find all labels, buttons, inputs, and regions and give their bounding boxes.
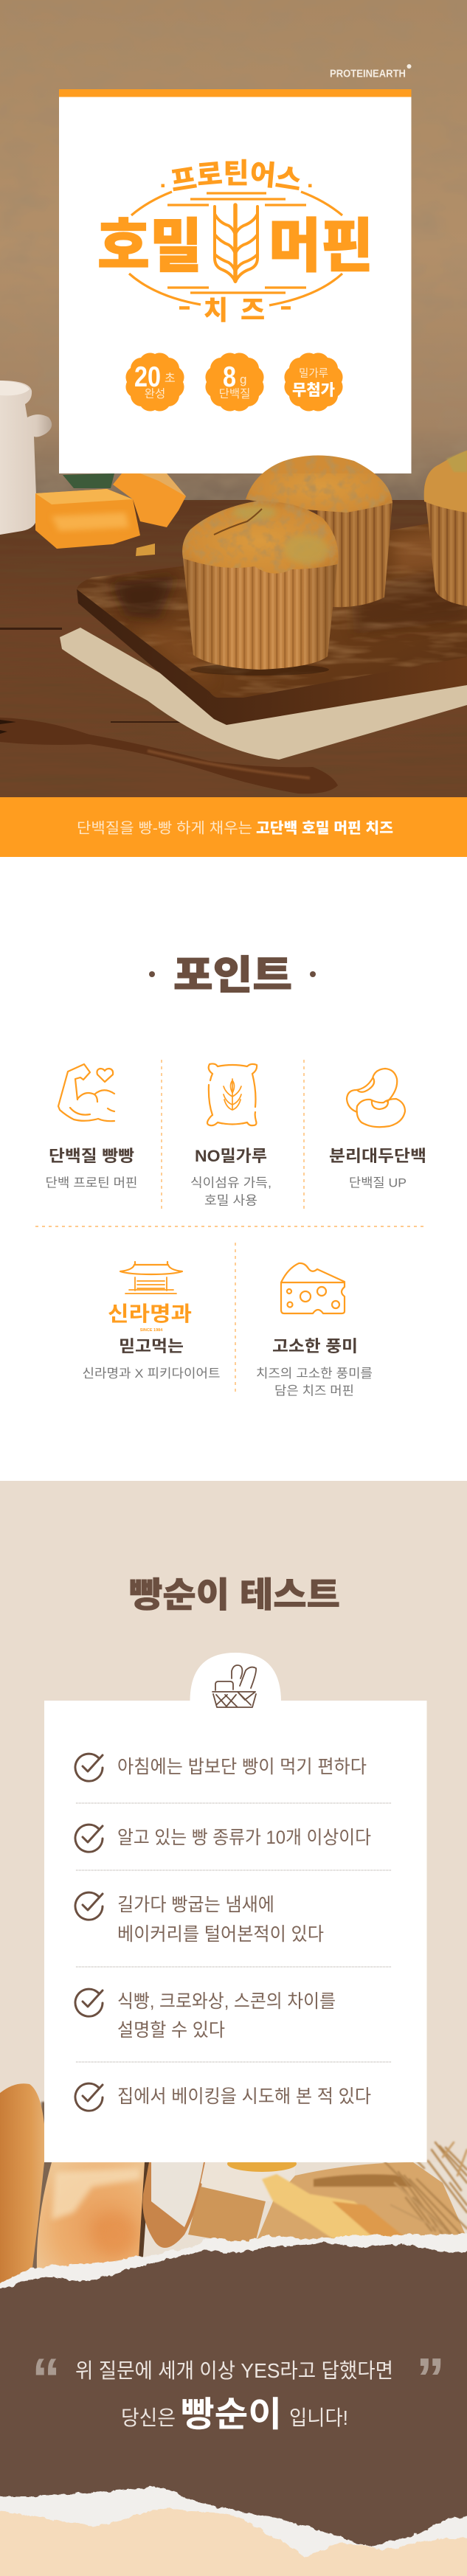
second loaf — [37, 2162, 145, 2270]
point: NO밀가루: 호밀 사용 — [204, 1193, 257, 1208]
badge: 밀가루 무첨가: 무첨가 — [292, 382, 335, 399]
brand: PROTEINEARTH: PROTEINEARTH — [330, 68, 406, 80]
result line 2 — [121, 2395, 348, 2434]
logo: 프로틴어스 arched text: 로 — [196, 159, 224, 192]
point: 분리대두단백: 단백질 UP — [349, 1176, 407, 1190]
left loaf — [0, 2083, 44, 2283]
result line 1: 위 질문에 세개 이상 YES라고 답했다면 — [75, 2359, 393, 2382]
badge: 8g 단백질 — [205, 353, 264, 412]
point: 분리대두단백: 분리대두단백 — [329, 1147, 426, 1165]
logo: 프로틴어스 arched text: 스 — [273, 163, 303, 198]
logo: 치즈 — [204, 295, 265, 325]
point: 믿고먹는 — [83, 1262, 220, 1381]
result line 2: 당신은 — [121, 2406, 176, 2429]
logo: 프로틴어스 arched text: 어 — [249, 159, 277, 192]
logo: 호밀: 호밀 — [97, 213, 202, 279]
check item 3 — [75, 1892, 324, 1945]
bamboo boards — [188, 2187, 266, 2246]
check item 4: 식빵, 크로와상, 스콘의 차이를 — [117, 1991, 336, 2012]
badge: 20초 완성: 20 — [134, 361, 161, 393]
point: NO밀가루 — [190, 1063, 271, 1208]
point: 고소한 풍미: 고소한 풍미 — [272, 1337, 358, 1355]
orange slogan banner: 단백질을 빵-빵 하게 채우는 — [77, 820, 252, 836]
white torn paper edge — [0, 2233, 467, 2557]
point: 분리대두단백 — [329, 1069, 426, 1190]
point: NO밀가루: 식이섬유 가득, — [190, 1176, 271, 1190]
logo: 치즈: 치 — [204, 295, 228, 325]
point: 단백질 빵빵: 단백질 빵빵 — [49, 1147, 134, 1165]
check item 1 — [75, 1754, 367, 1781]
logo: 프로틴어스 arched text: 프 — [169, 164, 199, 198]
icon: flour sack — [207, 1063, 257, 1125]
wooden board — [77, 524, 467, 725]
point: 단백질 빵빵: 단백 프로틴 머핀 — [46, 1176, 137, 1190]
muffin back — [246, 473, 392, 608]
section: points — [0, 857, 467, 1481]
result line 2: 빵순이 — [181, 2395, 282, 2434]
point: 고소한 풍미: 치즈의 고소한 풍미를 — [256, 1367, 373, 1381]
muffin far right — [424, 451, 467, 606]
point: 믿고먹는: 믿고먹는 — [119, 1337, 184, 1355]
check item 3: 길가다 빵굽는 냄새에 — [117, 1895, 274, 1915]
milk jar — [0, 381, 52, 535]
check item 4: 설명할 수 있다 — [117, 2020, 225, 2041]
check item 5 — [75, 2083, 371, 2111]
logo: frame arcs and rules — [129, 192, 342, 308]
badge: 8g 단백질: 8 — [223, 361, 236, 393]
heading: 빵순이 테스트: 빵순이 테스트 — [129, 1575, 340, 1614]
wheat stalks — [384, 2142, 467, 2235]
section: bread lover test — [0, 1481, 467, 2576]
point: 단백질 빵빵 — [46, 1064, 137, 1190]
logo: 프로틴어스 arched text: 틴 — [224, 159, 249, 190]
badge: 20초 완성: 완성 — [145, 387, 165, 400]
point: 믿고먹는: SINCE 1984 — [140, 1328, 163, 1333]
icon: cheese wedge — [281, 1263, 345, 1313]
logo: 프로틴어스 arched text — [169, 159, 303, 198]
orange slogan banner — [0, 797, 467, 857]
result line 2: 입니다! — [289, 2406, 348, 2429]
badge: 8g 단백질: g — [240, 372, 246, 386]
check item 2: 알고 있는 빵 종류가 10개 이상이다 — [117, 1827, 371, 1848]
check item 1: 아침에는 밥보단 빵이 먹기 편하다 — [117, 1757, 367, 1777]
icon: soybeans — [347, 1069, 405, 1127]
badge: 20초 완성: 초 — [165, 372, 176, 385]
logo: wheat emblem — [215, 205, 257, 282]
bakery photo — [0, 2083, 467, 2295]
muffin front — [180, 499, 341, 676]
point: 고소한 풍미: 담은 치즈 머핀 — [274, 1384, 354, 1398]
orange slogan banner: 고단백 호밀 머핀 치즈 — [256, 820, 393, 836]
badge: 20초 완성 — [125, 353, 184, 412]
check item 2 — [75, 1825, 371, 1852]
icon: flexed arm with heart — [58, 1064, 114, 1121]
brown panel — [0, 2243, 467, 2547]
point: NO밀가루: NO밀가루 — [195, 1147, 267, 1165]
cheese blocks — [35, 473, 186, 556]
white title card — [59, 89, 412, 473]
quote marks — [32, 2346, 445, 2411]
badge: 8g 단백질: 단백질 — [219, 387, 250, 400]
quote marks: “ — [32, 2346, 60, 2411]
logo: 치즈: 즈 — [241, 295, 265, 325]
product logo — [97, 159, 373, 325]
badge: 밀가루 무첨가 — [284, 353, 343, 412]
heading: 포인트: 포인트 — [173, 954, 292, 998]
logo: 머핀: 머핀 — [269, 213, 373, 279]
checklist card — [44, 1653, 426, 2162]
quote marks: ” — [416, 2346, 445, 2411]
card tab — [190, 1653, 281, 1701]
torn paper result panel — [0, 2233, 467, 2576]
hero photo: muffins on wooden board — [0, 0, 467, 797]
muffin back top overlapping card — [263, 456, 375, 473]
wooden spoon — [0, 718, 338, 794]
towel — [60, 628, 467, 760]
hero section — [0, 0, 467, 857]
check item 5: 집에서 베이킹을 시도해 본 적 있다 — [117, 2086, 371, 2107]
heading: 포인트 — [149, 954, 316, 998]
check item 3: 베이커리를 털어본적이 있다 — [117, 1924, 324, 1945]
pale bowl and cup — [201, 2162, 295, 2201]
point: 믿고먹는: 신라명과 — [108, 1302, 192, 1325]
check item 4 — [75, 1989, 336, 2041]
badge: 밀가루 무첨가: 밀가루 — [299, 367, 328, 380]
point: 고소한 풍미 — [256, 1263, 373, 1398]
logo: 신라명과 temple — [120, 1262, 182, 1294]
pastry twist — [262, 2174, 406, 2238]
icon: bread basket — [212, 1665, 256, 1707]
flour scoop — [142, 2162, 205, 2248]
point: 믿고먹는: 신라명과 X 피키다이어트 — [83, 1367, 220, 1381]
